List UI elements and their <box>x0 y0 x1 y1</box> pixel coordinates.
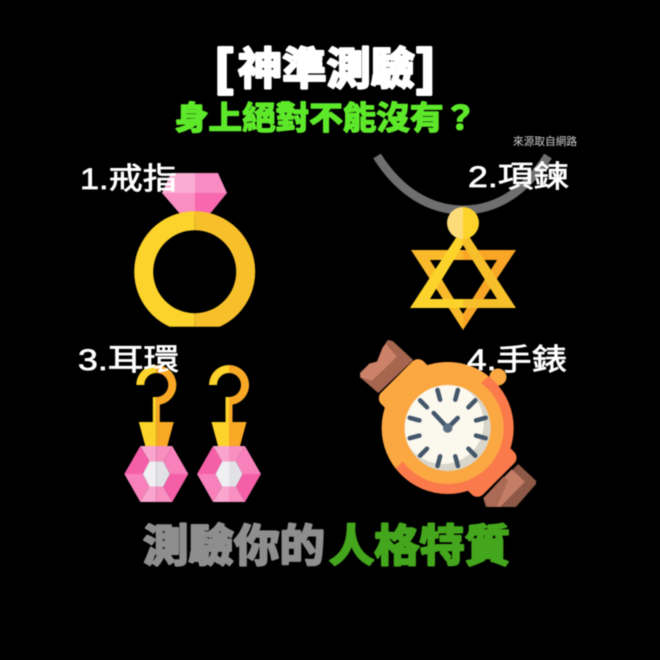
icon: star necklace <box>377 156 548 330</box>
footer: test your personality: 人格特質 <box>329 522 510 571</box>
source credit: 來源取自網路 <box>513 134 577 148</box>
icon: ring <box>134 173 255 332</box>
title: ] <box>417 39 434 95</box>
label: option 4 watch: 4.手錶 <box>467 344 567 377</box>
title: 神準測驗 <box>238 45 415 94</box>
footer: test your personality: 測驗你的 <box>143 522 325 571</box>
label: option 2 necklace: 2.項鍊 <box>468 161 569 194</box>
footer: test your personality <box>143 522 510 571</box>
label: option 3 earrings: 3.耳環 <box>78 344 179 377</box>
title: [ <box>216 39 233 95</box>
icon: right earring <box>197 365 261 502</box>
icon: left earring <box>124 365 188 502</box>
subtitle: 身上絕對不能沒有？ <box>175 100 477 136</box>
icon: wristwatch <box>359 339 537 508</box>
label: option 1 ring: 1.戒指 <box>80 163 177 196</box>
